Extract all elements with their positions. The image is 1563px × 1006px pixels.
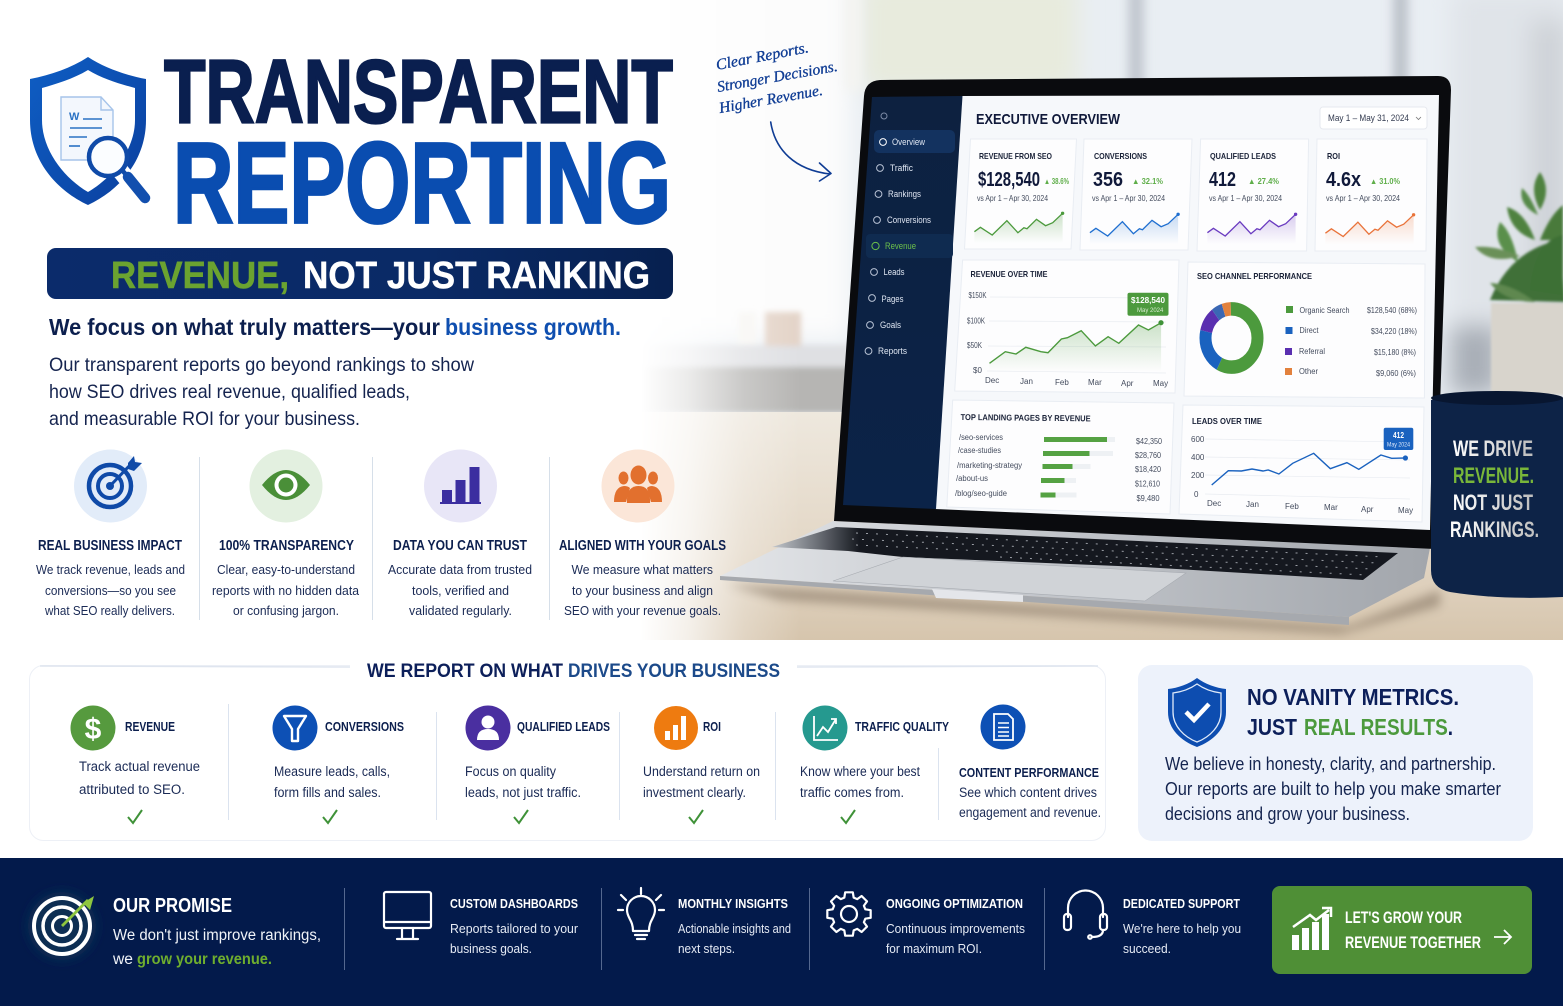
chart: leads over time: Feb — [1285, 502, 1299, 511]
coffee mug — [1431, 391, 1563, 598]
chart: leads over time: Dec — [1207, 499, 1221, 508]
our promise: we — [112, 951, 133, 968]
benefit: real business impact: We track revenue, leads and — [36, 562, 185, 577]
panel: what we report on — [30, 660, 1106, 840]
our promise: grow your revenue. — [137, 951, 272, 968]
chart: leads over time: Apr — [1361, 505, 1374, 514]
title: REPORTING — [173, 120, 671, 248]
KPI card: revenue from SEO: $128,540 — [978, 169, 1040, 191]
metric: qualified leads: QUALIFIED LEADS — [517, 720, 610, 734]
metric: qualified leads — [465, 706, 610, 823]
metric: revenue: attributed to SEO. — [79, 782, 185, 797]
metric: traffic quality — [800, 706, 950, 823]
chart: SEO channel performance donut: $9,060 (6%) — [1376, 369, 1416, 378]
monthly insights: Actionable insights and — [678, 921, 791, 936]
chart: SEO channel performance donut: Referral — [1299, 347, 1325, 356]
KPI card: conversions — [1080, 139, 1192, 250]
chart: revenue over time: $128,540 — [1131, 296, 1166, 305]
icon: headset — [1064, 890, 1107, 939]
subheading: business growth. — [445, 314, 621, 340]
our promise — [28, 892, 321, 968]
benefit: aligned with your goals: We measure what matters — [572, 562, 713, 577]
metric: ROI: investment clearly. — [643, 785, 746, 800]
benefit: real business impact: what SEO really delivers. — [44, 603, 175, 618]
benefit: aligned with your goals — [559, 450, 726, 618]
table: top landing pages by revenue: /about-us — [956, 474, 988, 483]
dedicated support: We're here to help you — [1123, 921, 1241, 936]
custom dashboards: Reports tailored to your — [450, 921, 579, 936]
chart: revenue over time: Feb — [1055, 378, 1069, 387]
banner: revenue, not just ranking: NOT JUST RANKING — [303, 255, 650, 297]
table: top landing pages by revenue: $9,480 — [1136, 494, 1160, 503]
KPI card: conversions: vs Apr 1 – Apr 30, 2024 — [1092, 194, 1165, 203]
monthly insights — [618, 888, 791, 956]
metric: qualified leads: Focus on quality — [465, 764, 556, 779]
ongoing optimization — [827, 892, 1025, 956]
KPI card: revenue from SEO: REVENUE FROM SEO — [979, 151, 1052, 161]
table: top landing pages by revenue: $12,610 — [1135, 480, 1160, 488]
chart: SEO channel performance donut: Other — [1299, 367, 1318, 376]
coffee mug: NOT JUST — [1453, 490, 1533, 515]
KPI card: ROI — [1315, 139, 1427, 251]
chart: SEO channel performance donut: Direct — [1300, 326, 1319, 335]
sidebar: Goals — [880, 320, 901, 330]
chart: leads over time: 600 — [1191, 435, 1205, 444]
handwritten note: Clear Reports. — [715, 39, 810, 74]
table: top landing pages by revenue: /blog/seo-guide — [955, 489, 1008, 498]
sidebar: Rankings — [888, 189, 921, 199]
icon: eye — [250, 450, 322, 522]
metric: revenue: Track actual revenue — [79, 759, 200, 774]
KPI card: conversions: 356 — [1093, 169, 1123, 191]
metric: traffic quality: TRAFFIC QUALITY — [855, 720, 950, 734]
benefit: aligned with your goals: ALIGNED WITH YOUR GOALS — [559, 538, 726, 554]
custom dashboards — [384, 892, 579, 956]
KPI card: conversions: ▲ 32.1% — [1132, 177, 1163, 186]
custom dashboards: CUSTOM DASHBOARDS — [450, 896, 578, 911]
icon: shield with report and magnifier: W — [69, 111, 80, 123]
benefit: data you can trust: validated regularly. — [409, 603, 512, 618]
intro paragraph: Our transparent reports go beyond rankings to show — [49, 354, 475, 376]
benefit: 100% transparency: or confusing jargon. — [233, 603, 339, 618]
plant on desk — [1475, 172, 1563, 395]
benefit: data you can trust: Accurate data from trusted — [388, 562, 532, 577]
handwritten note: Stronger Decisions. — [716, 58, 839, 96]
dashboard header: May 1 – May 31, 2024 — [1328, 113, 1409, 123]
laptop base — [720, 521, 1430, 617]
callout: no vanity metrics: JUST — [1247, 714, 1297, 740]
icon: team — [602, 450, 674, 522]
chart: leads over time: 400 — [1191, 453, 1205, 462]
table: top landing pages by revenue: $42,350 — [1136, 437, 1162, 446]
chart: leads over time: Mar — [1324, 503, 1338, 512]
benefit: data you can trust: tools, verified and — [412, 583, 509, 598]
KPI card: revenue from SEO: vs Apr 1 – Apr 30, 2024 — [977, 194, 1048, 203]
sidebar: Conversions — [887, 215, 931, 225]
chart: revenue over time: Apr — [1121, 379, 1134, 388]
dedicated support: succeed. — [1123, 941, 1171, 956]
benefit: 100% transparency: reports with no hidden data — [212, 583, 360, 598]
arrow — [1494, 930, 1511, 944]
chart: leads over time: 200 — [1191, 471, 1205, 480]
metric: conversions: form fills and sales. — [274, 785, 381, 800]
metric: content performance: engagement and revenue. — [959, 805, 1101, 820]
call to action button: REVENUE TOGETHER — [1345, 933, 1481, 952]
metric: conversions: CONVERSIONS — [325, 720, 404, 734]
title: TRANSPARENT — [164, 42, 673, 142]
callout: no vanity metrics: We believe in honesty, clarity, and partnership. — [1165, 754, 1496, 774]
heading — [367, 661, 780, 682]
table: top landing pages by revenue: TOP LANDING PAGES BY REVENUE — [961, 412, 1091, 423]
sidebar — [843, 96, 962, 509]
KPI card: qualified leads: ▲ 27.4% — [1248, 177, 1279, 186]
background office photo — [620, 0, 1563, 640]
trackpad — [833, 557, 1186, 601]
metric: conversions — [272, 706, 404, 823]
table: top landing pages by revenue: /case-studies — [958, 446, 1001, 455]
chart: leads over time: Jan — [1246, 500, 1259, 509]
handwritten note — [715, 39, 839, 117]
KPI card: conversions: CONVERSIONS — [1094, 151, 1147, 161]
screen — [935, 95, 1439, 530]
chart: revenue over time: May — [1153, 379, 1168, 388]
sidebar: Reports — [878, 346, 907, 356]
heading: WE REPORT ON WHAT — [367, 661, 563, 682]
call to action button: LET'S GROW YOUR — [1345, 908, 1462, 927]
coffee mug: REVENUE. — [1453, 463, 1534, 488]
subheading: We focus on what truly matters—your — [49, 314, 440, 340]
chart: leads over time: LEADS OVER TIME — [1192, 416, 1262, 426]
sidebar: Leads — [884, 267, 905, 277]
benefit: real business impact — [36, 450, 185, 618]
benefit: 100% transparency: 100% TRANSPARENCY — [219, 538, 354, 554]
our promise: OUR PROMISE — [113, 895, 232, 917]
custom dashboards: business goals. — [450, 941, 532, 956]
chart: leads over time: May 2024 — [1387, 442, 1411, 448]
intro paragraph: how SEO drives real revenue, qualified leads, — [49, 381, 410, 403]
chart: revenue over time: Dec — [985, 376, 999, 385]
monthly insights: next steps. — [678, 941, 735, 956]
callout: no vanity metrics — [1138, 665, 1533, 841]
metric: traffic quality: Know where your best — [800, 764, 920, 779]
chart: revenue over time — [955, 260, 1179, 393]
table: top landing pages by revenue: /seo-services — [959, 433, 1003, 442]
metric: revenue: $ — [85, 713, 102, 746]
benefit: real business impact: conversions—so you see — [45, 583, 176, 598]
heading: DRIVES YOUR BUSINESS — [568, 661, 780, 682]
KPI card: revenue from SEO: ▲ 38.6% — [1044, 177, 1069, 186]
ongoing optimization: Continuous improvements — [886, 921, 1025, 936]
KPI card: qualified leads: vs Apr 1 – Apr 30, 2024 — [1209, 194, 1282, 203]
chart: revenue over time: Jan — [1020, 377, 1033, 386]
icon: bar chart — [424, 450, 497, 522]
handwritten note: Higher Revenue. — [717, 82, 824, 117]
chart: leads over time: 0 — [1194, 490, 1199, 499]
chart: SEO channel performance donut: $128,540 (68%) — [1367, 306, 1417, 315]
KPI card: ROI: vs Apr 1 – Apr 30, 2024 — [1326, 194, 1400, 203]
callout: no vanity metrics: REAL RESULTS. — [1304, 714, 1453, 740]
metric: ROI — [643, 706, 760, 823]
chart: leads over time — [1179, 405, 1424, 522]
chart: revenue over time: $150K — [968, 291, 987, 300]
benefit: 100% transparency: Clear, easy-to-understand — [217, 562, 355, 577]
icon: promise target — [28, 892, 96, 960]
benefit: data you can trust: DATA YOU CAN TRUST — [393, 538, 527, 554]
sidebar: Traffic — [890, 163, 913, 173]
chart: SEO channel performance donut: $34,220 (18%) — [1371, 327, 1417, 336]
call to action button — [1272, 886, 1532, 974]
chart: revenue over time: $50K — [967, 341, 983, 350]
table: top landing pages by revenue: /marketing-strategy — [957, 461, 1022, 470]
laptop lid — [834, 76, 1451, 549]
KPI card: qualified leads: QUALIFIED LEADS — [1210, 151, 1276, 161]
chart: SEO channel performance donut: SEO CHANNEL PERFORMANCE — [1197, 271, 1312, 281]
benefit: aligned with your goals: to your business and align — [572, 583, 713, 598]
arrow: note to dashboard — [771, 122, 831, 181]
KPI card: ROI: 4.6x — [1326, 169, 1361, 191]
chart: revenue over time: $100K — [967, 316, 986, 326]
banner: revenue, not just ranking — [47, 248, 673, 299]
sidebar: Revenue — [885, 241, 916, 251]
chart: revenue over time: REVENUE OVER TIME — [970, 269, 1048, 279]
chart: revenue over time: Mar — [1088, 378, 1102, 387]
metric: content performance: See which content drives — [959, 785, 1097, 800]
metric: ROI: ROI — [703, 720, 721, 734]
callout: no vanity metrics: decisions and grow your business. — [1165, 804, 1410, 824]
icon: gear — [827, 892, 871, 936]
callout: no vanity metrics: NO VANITY METRICS. — [1247, 684, 1459, 710]
icon: shield with report and magnifier — [30, 57, 146, 205]
benefit: 100% transparency — [212, 450, 360, 618]
chart: revenue over time: May 2024 — [1137, 308, 1164, 314]
sidebar: Pages — [882, 294, 904, 304]
banner: revenue, not just ranking: REVENUE, — [111, 255, 289, 297]
benefit: aligned with your goals: SEO with your revenue goals. — [564, 603, 721, 618]
chart: SEO channel performance donut: $15,180 (8%) — [1374, 348, 1416, 357]
benefit: data you can trust — [388, 450, 532, 618]
chart: leads over time: May — [1398, 506, 1413, 515]
icon: target — [74, 450, 147, 522]
KPI card: qualified leads — [1197, 139, 1309, 251]
icon: light bulb — [618, 888, 664, 939]
icon: growth chart — [1292, 908, 1331, 950]
ongoing optimization: for maximum ROI. — [886, 941, 982, 956]
metric: ROI: Understand return on — [643, 764, 760, 779]
KPI card: revenue from SEO — [964, 139, 1076, 249]
laptop — [720, 76, 1451, 634]
metric: revenue: REVENUE — [125, 720, 175, 734]
white section background — [0, 640, 1563, 858]
dashboard header: EXECUTIVE OVERVIEW — [976, 111, 1121, 128]
intro paragraph — [49, 354, 475, 430]
table: top landing pages by revenue: $18,420 — [1135, 465, 1161, 474]
metric: revenue — [70, 706, 200, 823]
benefit: real business impact: REAL BUSINESS IMPACT — [38, 538, 182, 554]
our promise: We don't just improve rankings, — [113, 927, 321, 944]
table: top landing pages by revenue — [947, 400, 1174, 514]
keyboard — [772, 527, 1398, 580]
sidebar: Overview — [892, 137, 925, 147]
chart: leads over time: 412 — [1393, 431, 1404, 440]
metric: content performance — [959, 704, 1101, 820]
metric: traffic quality: traffic comes from. — [800, 785, 904, 800]
icon: shield check — [1168, 678, 1226, 747]
KPI card: ROI: ROI — [1327, 151, 1340, 161]
footer band — [0, 858, 1563, 1006]
chart: SEO channel performance donut — [1184, 262, 1425, 398]
dedicated support: DEDICATED SUPPORT — [1123, 896, 1240, 911]
title — [164, 42, 673, 248]
table: top landing pages by revenue: $28,760 — [1135, 451, 1161, 460]
KPI card: ROI: ▲ 31.0% — [1370, 177, 1400, 186]
monthly insights: MONTHLY INSIGHTS — [678, 896, 788, 911]
dedicated support — [1064, 890, 1241, 956]
chart: revenue over time: $0 — [973, 366, 982, 375]
icon: monitor — [384, 892, 431, 939]
metric: conversions: Measure leads, calls, — [274, 764, 390, 779]
metric: qualified leads: leads, not just traffic. — [465, 785, 581, 800]
chart: SEO channel performance donut: Organic Search — [1300, 306, 1350, 315]
intro paragraph: and measurable ROI for your business. — [49, 408, 360, 430]
KPI card: qualified leads: 412 — [1209, 169, 1236, 191]
dashboard header — [976, 107, 1427, 129]
callout: no vanity metrics: Our reports are built to help you make smarter — [1165, 779, 1501, 799]
ongoing optimization: ONGOING OPTIMIZATION — [886, 896, 1023, 911]
coffee mug: WE DRIVE — [1453, 436, 1533, 461]
metric: content performance: CONTENT PERFORMANCE — [959, 766, 1099, 780]
